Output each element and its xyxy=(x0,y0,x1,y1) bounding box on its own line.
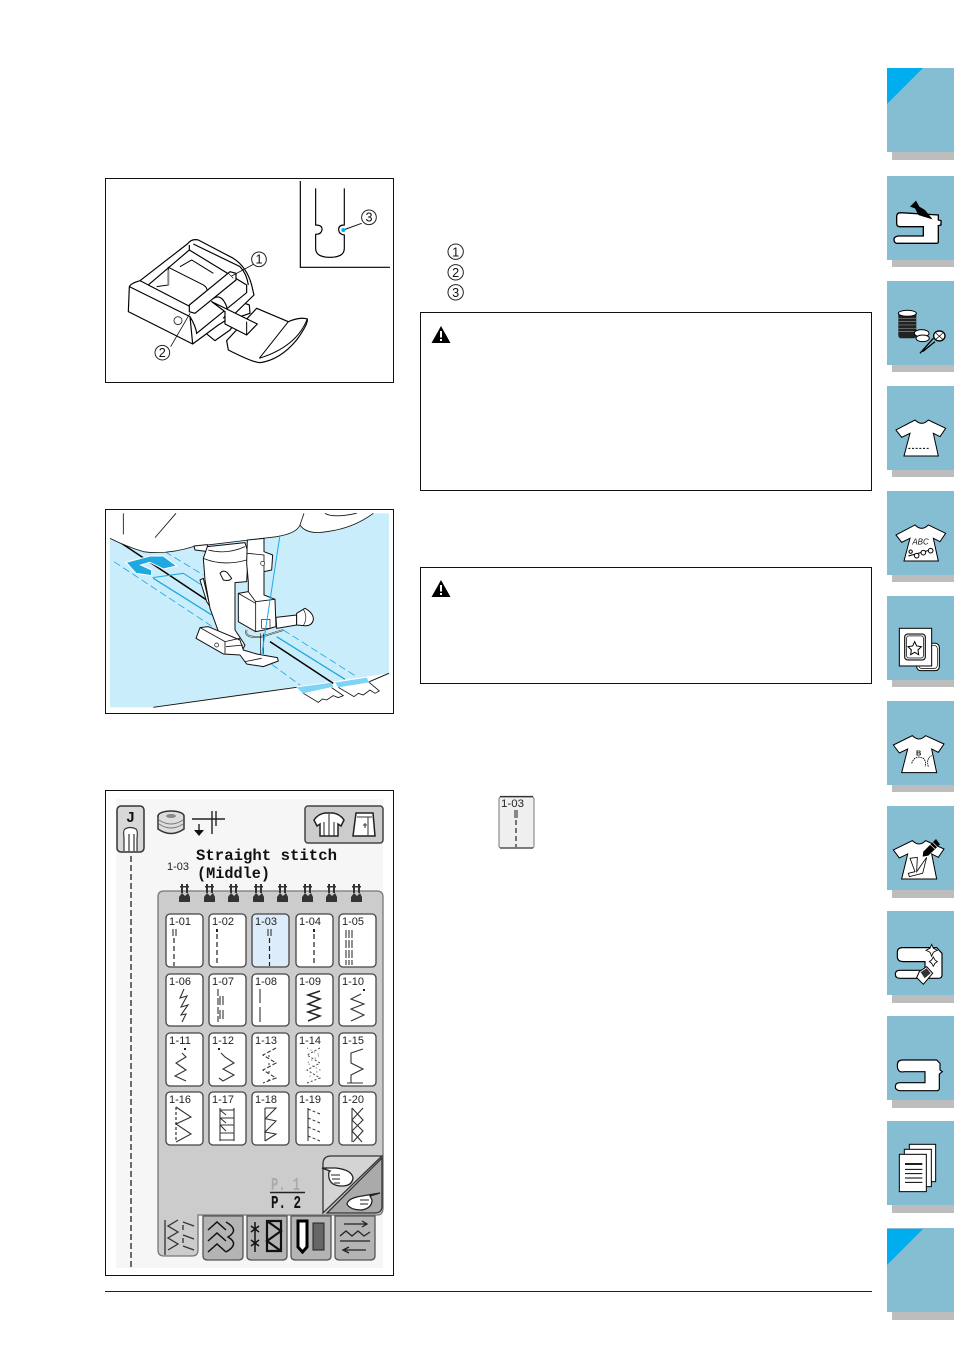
stitch card 1-18: 1-18 xyxy=(255,1094,277,1106)
tab: decorative xyxy=(203,1216,243,1260)
inset: foot sole with notch xyxy=(300,181,390,267)
stitch card 1-12 xyxy=(209,1033,246,1086)
panel: LCD stitch selection screen xyxy=(106,790,394,1276)
icon: warning triangle xyxy=(432,326,450,343)
tab: bottom blank xyxy=(887,1228,954,1320)
tab: satin xyxy=(247,1216,287,1260)
tab: machine with sparkles xyxy=(887,911,954,1003)
stitch card 1-09 xyxy=(296,974,333,1026)
category tabs xyxy=(165,1216,375,1260)
stitch card 1-16 xyxy=(166,1092,203,1145)
illustration: walking foot xyxy=(128,240,307,363)
presser foot assembly xyxy=(194,535,313,667)
stitch card 1-01: 1-01 xyxy=(169,916,191,928)
stitch card 1-12: 1-12 xyxy=(212,1035,234,1047)
button: page turn hands xyxy=(322,1156,382,1213)
stitch card 1-07 xyxy=(209,974,246,1026)
tab: documents xyxy=(887,1121,954,1213)
stitch card 1-10: 1-10 xyxy=(342,976,364,988)
stitch card 1-01 xyxy=(166,914,203,967)
fabric xyxy=(110,513,389,707)
stitch card 1-13: 1-13 xyxy=(255,1035,277,1047)
tab: top blank xyxy=(887,68,954,160)
stitch card 1-14: 1-14 xyxy=(299,1035,321,1047)
legend: part numbers: 3 xyxy=(452,286,459,300)
stitch card 1-11: 1-11 xyxy=(169,1035,191,1047)
icon: selected stitch key 1-03: 1-03 xyxy=(501,798,524,810)
stitch card 1-13 xyxy=(252,1033,289,1086)
stitch card 1-07: 1-07 xyxy=(212,976,234,988)
tab: directional xyxy=(335,1216,375,1260)
illustration: walking foot: 1 xyxy=(255,253,263,267)
stitch guide line xyxy=(130,856,132,1268)
page indicator: P. 1 xyxy=(271,1176,300,1196)
heading: stitch name: (Middle) xyxy=(197,865,270,883)
tab: shirt with letter B xyxy=(887,701,954,792)
tab: shirt with pen xyxy=(887,806,954,898)
stitch card 1-17: 1-17 xyxy=(212,1094,234,1106)
stitch card 1-14 xyxy=(296,1033,333,1086)
stitch card 1-15: 1-15 xyxy=(342,1035,364,1047)
panel: sewing with foot on fabric xyxy=(106,510,394,714)
stitch card 1-11 xyxy=(166,1033,203,1086)
stitch card 1-19 xyxy=(296,1092,333,1145)
stitch card 1-20: 1-20 xyxy=(342,1094,364,1106)
seam and guide lines xyxy=(114,542,357,685)
stitch card 1-04: 1-04 xyxy=(299,916,321,928)
stitch card 1-16: 1-16 xyxy=(169,1094,191,1106)
stitch card 1-09: 1-09 xyxy=(299,976,321,988)
tab: embroidery frame xyxy=(887,596,954,687)
page indicator xyxy=(270,1176,305,1214)
tab: thread and scissors xyxy=(887,281,954,372)
heading: stitch name: 1-03 xyxy=(167,861,189,873)
icon: presser foot J xyxy=(117,806,144,852)
stitch card 1-08 xyxy=(252,974,289,1026)
stitch card 1-17 xyxy=(209,1092,246,1145)
stitch card 1-05 xyxy=(339,914,376,967)
tab: buttonhole xyxy=(291,1216,331,1260)
stitch card 1-20 xyxy=(339,1092,376,1145)
stitch card 1-04 xyxy=(296,914,333,967)
icon: warning triangle xyxy=(432,580,450,597)
tape ends xyxy=(153,673,389,707)
legend: part numbers: 1 xyxy=(452,245,459,259)
tab: machine xyxy=(887,1016,954,1108)
page indicator: P. 2 xyxy=(271,1194,301,1214)
tab: shirt with stitching xyxy=(887,386,954,477)
stitch card 1-06: 1-06 xyxy=(169,976,191,988)
stitch card 1-03 selected: 1-03 xyxy=(255,916,277,928)
stitch card 1-02 xyxy=(209,914,246,967)
legend: part numbers: 2 xyxy=(452,266,459,280)
spiral binding rings xyxy=(179,884,362,902)
caution box 1 xyxy=(420,312,872,490)
stitch card 1-15 xyxy=(339,1033,376,1086)
panel: presser foot diagram xyxy=(106,178,394,382)
heading: stitch name xyxy=(167,847,337,883)
tab: shirt with ABC embroidery xyxy=(887,491,954,582)
button: garment guide xyxy=(305,806,383,843)
tab: utility stitches xyxy=(165,1220,194,1255)
inset: foot sole with notch: 3 xyxy=(365,211,372,225)
stitch card 1-19: 1-19 xyxy=(299,1094,321,1106)
tab: machine and hand xyxy=(887,176,954,267)
arrow: reverse direction xyxy=(126,556,177,576)
tab: shirt with letter B: B xyxy=(916,749,921,758)
icon: bobbin and needle xyxy=(158,811,225,836)
stitch card 1-03 selected xyxy=(252,914,289,967)
stitch card 1-05: 1-05 xyxy=(342,916,364,928)
tab: shirt with ABC embroidery: ABC xyxy=(911,538,929,547)
machine body xyxy=(110,513,373,553)
caution box 2 xyxy=(420,568,872,684)
heading: stitch name: Straight stitch xyxy=(196,847,337,865)
illustration: walking foot: 2 xyxy=(159,346,166,360)
stitch pattern page xyxy=(158,884,383,1260)
icon: selected stitch key 1-03 xyxy=(499,796,534,848)
stitch card 1-02: 1-02 xyxy=(212,916,234,928)
icon: presser foot J: J xyxy=(126,810,135,827)
footer rule xyxy=(105,1290,872,1292)
stitch card 1-18 xyxy=(252,1092,289,1145)
stitch card 1-06 xyxy=(166,974,203,1026)
stitch card 1-08: 1-08 xyxy=(255,976,277,988)
stitch card 1-10 xyxy=(339,974,376,1026)
legend: part numbers xyxy=(448,244,463,300)
